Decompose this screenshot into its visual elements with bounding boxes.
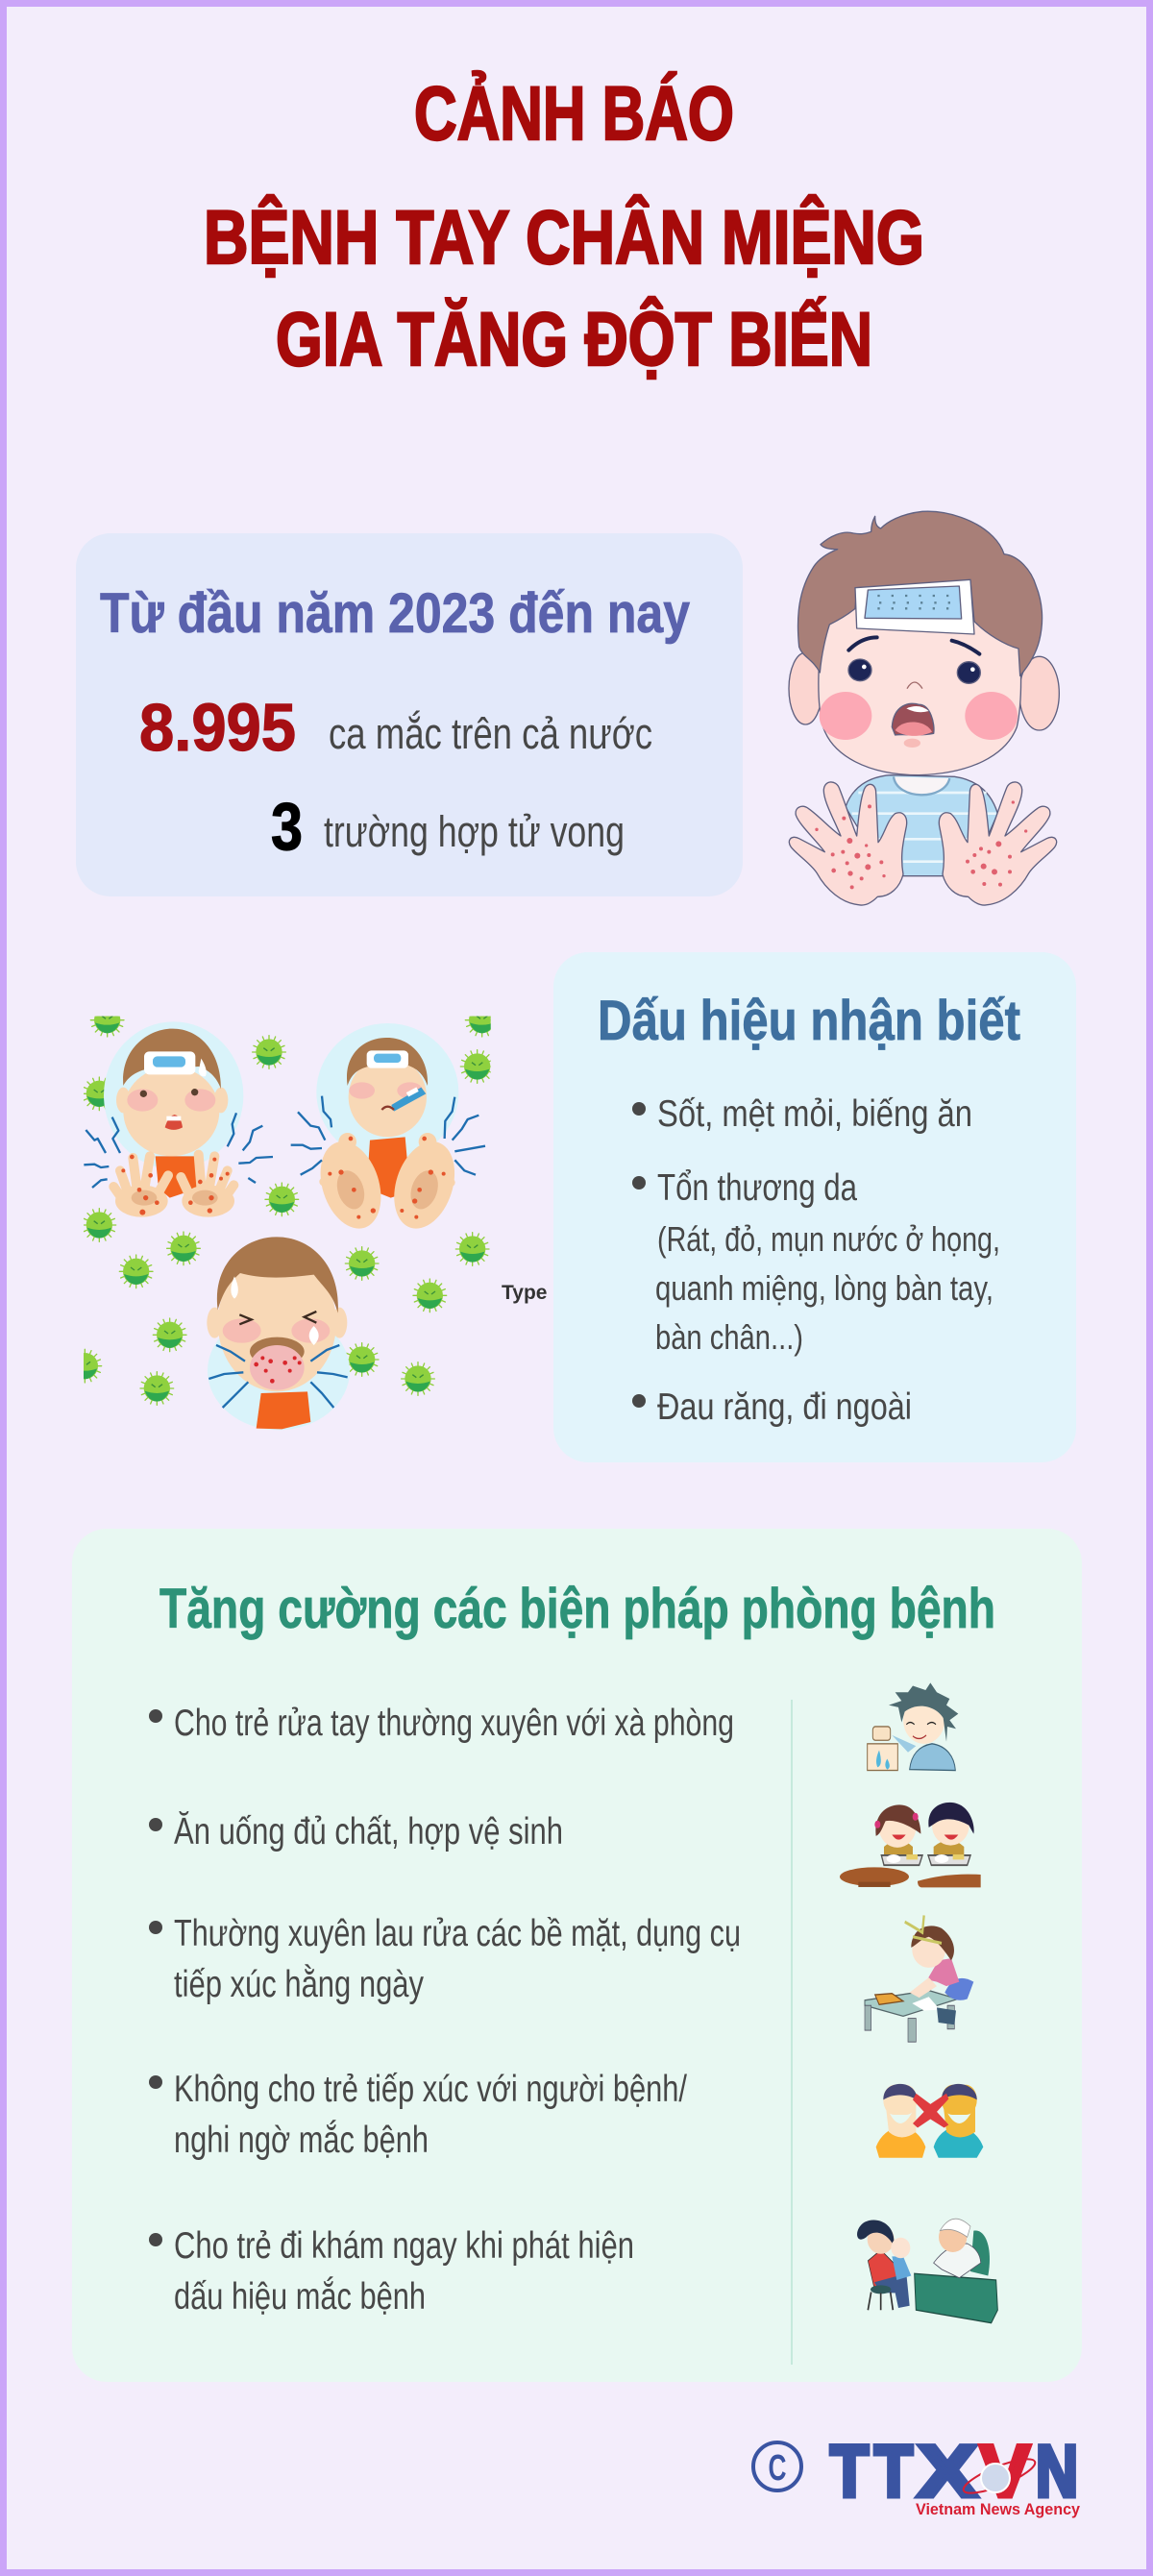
list of signs: Đau răng, đi ngoài (657, 1386, 912, 1428)
icon: child washing hands (868, 1682, 958, 1771)
logo: TTXVN: N (1036, 2431, 1078, 2513)
stat: deaths (271, 789, 625, 864)
stat: cases (139, 690, 652, 765)
logo: TTXVN: Vietnam News Agency (916, 2500, 1081, 2518)
panel: statistics (76, 533, 743, 896)
heading: warning signs: Dấu hiệu nhận biết (598, 990, 1020, 1052)
left hand (789, 782, 907, 905)
icon: woman wiping a table (865, 1915, 973, 2042)
stat: cases: 8.995 (139, 690, 296, 765)
illustration: sick boy showing hands (789, 511, 1059, 905)
list of signs: Sốt, mệt mỏi, biếng ăn (657, 1093, 972, 1135)
title: CẢNH BÁO (414, 70, 734, 156)
list of prevention measures: dấu hiệu mắc bệnh (174, 2276, 426, 2318)
child with tongue rash (207, 1237, 350, 1430)
stat: deaths: trường hợp tử vong (324, 807, 625, 856)
logo: TTXVN: T (830, 2431, 869, 2513)
child with foot rash and thermometer (291, 1023, 485, 1237)
stray label: Type: Type (502, 1282, 547, 1304)
list of prevention measures: nghi ngờ mắc bệnh (174, 2120, 429, 2161)
right hand (939, 782, 1057, 905)
list of prevention measures: Ăn uống đủ chất, hợp vệ sinh (174, 1811, 563, 1852)
list of signs: (Rát, đỏ, mụn nước ở họng, (657, 1219, 1000, 1259)
list of prevention measures: Cho trẻ rửa tay thường xuyên với xà phòng (174, 1703, 734, 1744)
title: GIA TĂNG ĐỘT BIẾN (276, 296, 872, 381)
list of prevention measures: Cho trẻ đi khám ngay khi phát hiện (174, 2225, 634, 2267)
viruses (68, 1003, 499, 1405)
child with hand rash (84, 1021, 273, 1217)
list of prevention measures: tiếp xúc hằng ngày (174, 1964, 424, 2005)
list of prevention measures: Không cho trẻ tiếp xúc với người bệnh/ (174, 2069, 687, 2110)
logo: TTXVN: T (874, 2431, 913, 2513)
heading: since start of 2023: Từ đầu năm 2023 đến nay (100, 582, 690, 645)
illustration: three symptomatic children and viruses (68, 1003, 499, 1430)
copyright symbol (753, 2442, 801, 2490)
logo: TTXVN: X (918, 2431, 977, 2513)
logo: TTXVN (830, 2431, 1081, 2518)
icon: avoid contact with sick child (876, 2084, 983, 2158)
list of prevention measures: Thường xuyên lau rửa các bề mặt, dụng cụ (174, 1913, 741, 1954)
logo: TTXVN: V (980, 2431, 1030, 2513)
panel: prevention (72, 1529, 1082, 2382)
stat: deaths: 3 (271, 789, 303, 864)
list of signs: bàn chân...) (655, 1317, 803, 1357)
panel: warning signs (553, 952, 1076, 1462)
list of signs: quanh miệng, lòng bàn tay, (655, 1268, 994, 1308)
list of prevention measures (149, 1703, 741, 2318)
stat: cases: ca mắc trên cả nước (329, 709, 652, 758)
title (204, 70, 924, 381)
icon: two children eating (840, 1803, 981, 1887)
list of signs (632, 1093, 1000, 1428)
title: BỆNH TAY CHÂN MIỆNG (204, 194, 924, 280)
icon: mother and baby at doctor (857, 2219, 997, 2323)
list of signs: Tổn thương da (657, 1167, 857, 1209)
copyright symbol: C (769, 2448, 786, 2489)
